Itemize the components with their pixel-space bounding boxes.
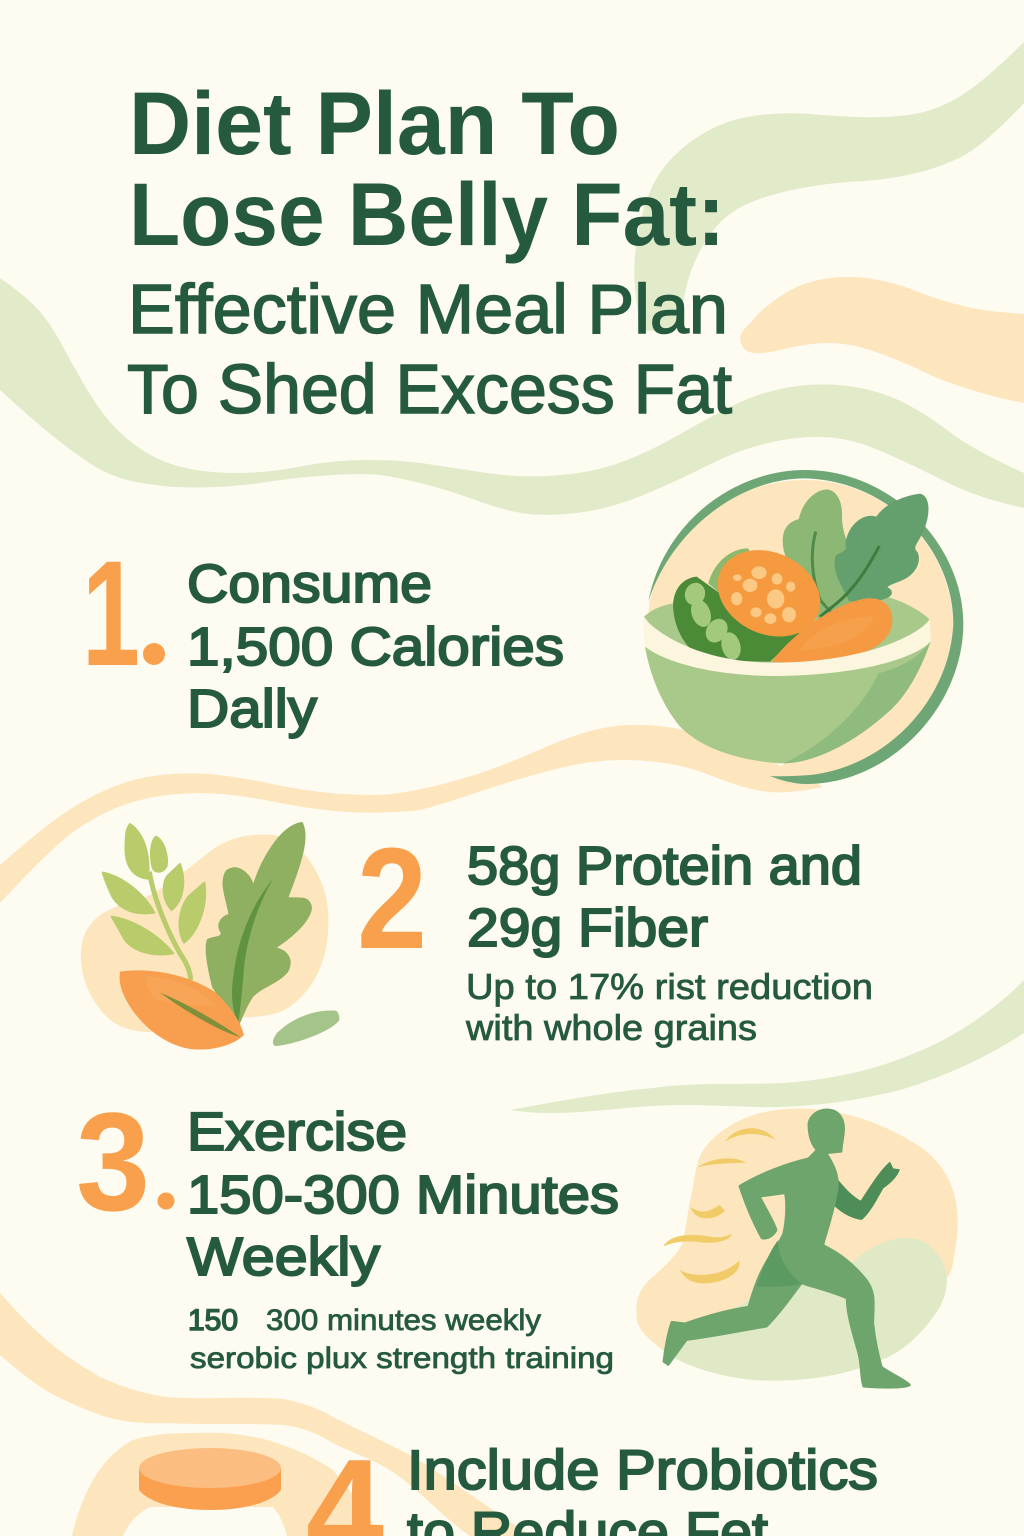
title — [127, 73, 732, 428]
title line 1: Diet Plan To — [129, 73, 620, 173]
icon: salad bowl — [643, 470, 963, 784]
step 4 heading: Include Probiotics — [407, 1438, 878, 1501]
step 2 heading — [467, 836, 862, 958]
step 1 heading: Consume — [187, 554, 432, 614]
panel: step 1 text — [82, 529, 564, 739]
panel: step 2 text — [357, 818, 873, 1048]
icon: runner — [636, 1109, 958, 1388]
step 2 heading: 58g Protein and — [467, 836, 862, 896]
step 2 note — [465, 966, 873, 1048]
step 3 note: 300 minutes weekly — [266, 1304, 541, 1337]
step 2 note: with whole grains — [465, 1007, 757, 1048]
step 1 heading — [187, 554, 564, 739]
step 3 heading: 150-300 Minutes — [187, 1165, 619, 1225]
panel: step 4 — [72, 1429, 878, 1536]
step 3 heading: Exercise — [187, 1102, 407, 1162]
step 2 note: Up to 17% rist reduction — [466, 966, 873, 1007]
step 1 dot — [143, 643, 165, 665]
subtitle line 2: To Shed Excess Fat — [127, 350, 732, 428]
step 1 heading: 1,500 Calories — [187, 617, 564, 677]
step 1 heading: Dally — [187, 679, 317, 739]
subtitle line 1: Effective Meal Plan — [128, 270, 728, 348]
step 4 heading — [407, 1438, 878, 1536]
step 3 dot — [158, 1192, 174, 1210]
title line 2: Lose Belly Fat: — [129, 164, 725, 264]
step 3 heading: Weekly — [187, 1227, 380, 1287]
step 3 note: serobic plux strength training — [190, 1342, 614, 1375]
step 3 number: 3 — [76, 1083, 150, 1240]
step 2 heading: 29g Fiber — [467, 898, 708, 958]
step 1 number: 1 — [82, 529, 140, 697]
panel: step 3 text — [76, 1083, 619, 1375]
step 2 number: 2 — [357, 818, 427, 979]
step 3 note: 150 — [188, 1304, 238, 1337]
step 3 heading — [187, 1102, 619, 1287]
icon: probiotics jar — [72, 1433, 380, 1536]
icon: leaves and seed — [81, 823, 339, 1050]
step 3 note — [188, 1304, 614, 1375]
